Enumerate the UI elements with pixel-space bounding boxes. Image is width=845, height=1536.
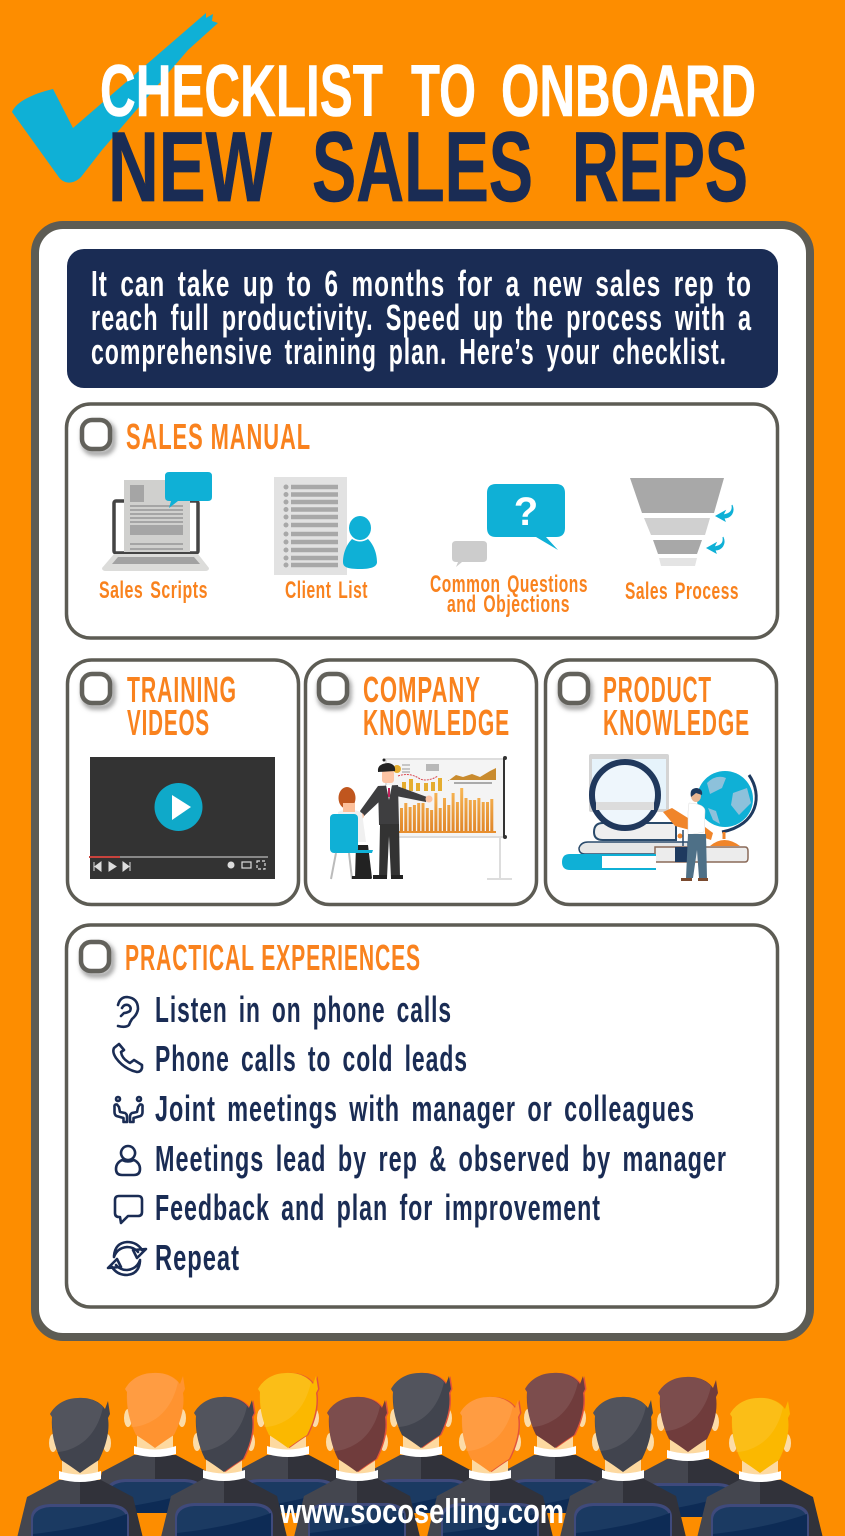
intro banner	[67, 249, 778, 388]
label: client list: Client List	[285, 577, 368, 604]
list item: phone calls to cold leads	[113, 1038, 468, 1079]
heading: product knowledge	[603, 669, 750, 743]
list item: listen in on phone calls	[118, 989, 452, 1030]
main white card	[35, 225, 810, 1337]
icon: sales scripts laptop	[102, 472, 212, 571]
title: TO	[411, 51, 476, 132]
title	[100, 51, 756, 222]
panel: company knowledge	[306, 660, 536, 904]
panel: sales manual	[66, 404, 778, 638]
heading: company knowledge	[363, 669, 510, 743]
heading: sales manual: SALES MANUAL	[126, 416, 311, 457]
checkbox: sales manual	[82, 420, 113, 453]
title: NEW	[108, 111, 272, 222]
list item: repeat: Repeat	[155, 1237, 240, 1278]
label: common questions and objections	[430, 571, 588, 618]
label: common questions and objections: Common Questions	[430, 571, 588, 598]
checkbox: practical experiences	[81, 942, 112, 975]
heading: company knowledge: COMPANY	[363, 669, 481, 710]
list item: phone calls to cold leads: Phone calls to cold leads	[155, 1038, 468, 1079]
label: common questions and objections: and Objections	[447, 591, 570, 618]
list item: feedback and plan: Feedback and plan for improvement	[155, 1187, 601, 1228]
icon: client list	[274, 477, 377, 575]
heading: training videos	[127, 669, 237, 743]
title: REPS	[572, 111, 748, 222]
heading: company knowledge: KNOWLEDGE	[363, 702, 510, 743]
title: CHECKLIST	[100, 51, 383, 132]
icon: question bubbles	[452, 484, 565, 567]
panel: practical experiences	[66, 925, 778, 1307]
illustration: audience front row	[17, 1397, 823, 1536]
heading: training videos: VIDEOS	[127, 702, 210, 743]
illustration: presenter with chart board	[330, 756, 512, 879]
label: sales process: Sales Process	[625, 578, 739, 605]
website url: www.socoselling.com	[279, 1493, 564, 1531]
icon: question bubbles: ?	[514, 490, 538, 534]
title: SALES	[312, 111, 533, 222]
panel: product knowledge	[546, 660, 776, 904]
checkbox: training videos	[82, 674, 113, 707]
icon: blue check mark	[12, 13, 218, 183]
list item: feedback and plan	[115, 1187, 601, 1228]
illustration: magnifier, books and globe	[562, 754, 756, 881]
label: sales scripts: Sales Scripts	[99, 577, 208, 604]
video player	[89, 757, 275, 879]
heading: product knowledge: PRODUCT	[603, 669, 712, 710]
checkbox: product knowledge	[560, 674, 590, 707]
heading: practical experiences: PRACTICAL EXPERIENCES	[125, 937, 421, 978]
list item: repeat	[108, 1237, 240, 1278]
illustration: audience back row	[92, 1373, 751, 1517]
panel: training videos	[68, 660, 298, 904]
checkbox: company knowledge	[319, 674, 349, 707]
list item: listen in on phone calls: Listen in on phone calls	[155, 989, 452, 1030]
heading: training videos: TRAINING	[127, 669, 237, 710]
icon: sales funnel	[630, 478, 733, 566]
